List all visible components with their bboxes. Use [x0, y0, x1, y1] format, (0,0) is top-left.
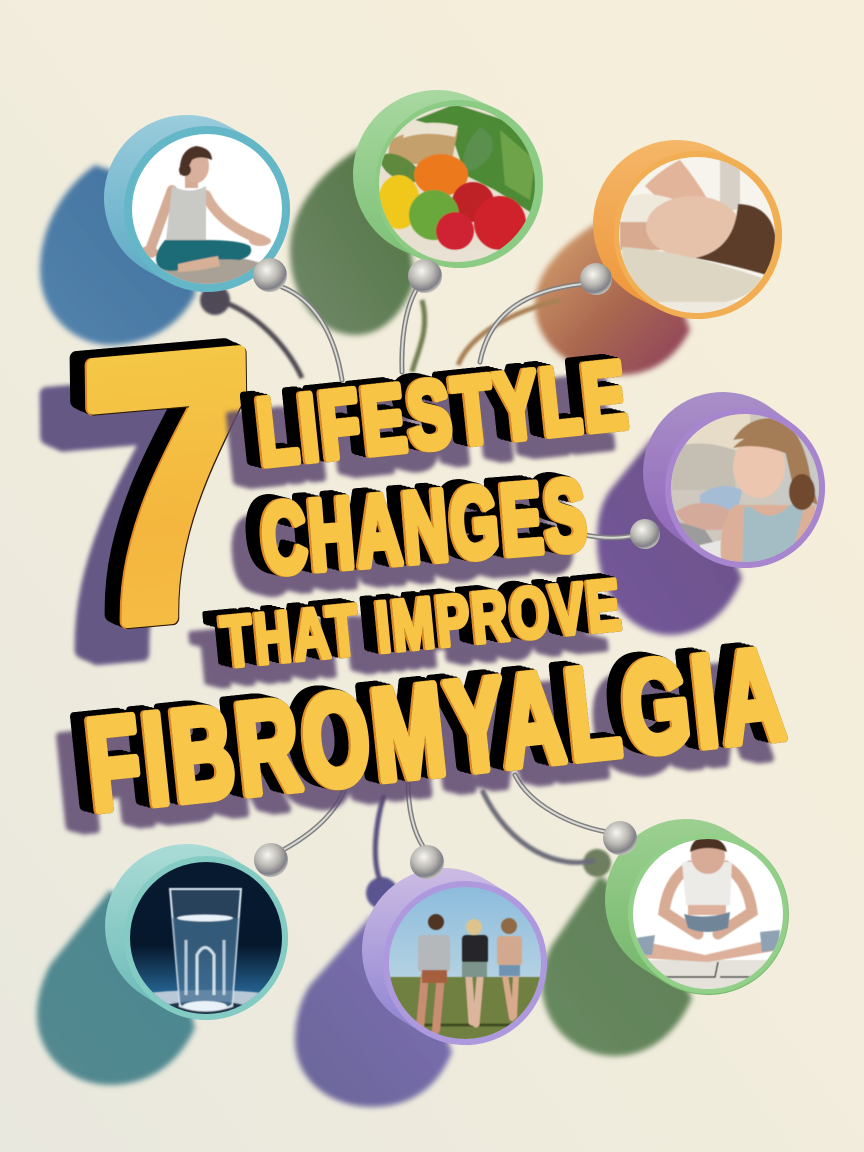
- photo: sleeping woman: [620, 160, 775, 313]
- title: LIFESTYLE: LIFESTYLE: [252, 341, 634, 486]
- disc: [444, 950, 465, 963]
- panel: walking outdoors: [383, 881, 550, 1052]
- disc: [677, 224, 698, 235]
- connector wires: [282, 284, 632, 850]
- panel: gentle stretching: [628, 834, 790, 995]
- disc: [187, 926, 206, 938]
- title: FIBROMYALGIA: FIBROMYALGIA: [81, 621, 794, 839]
- panel: yoga meditation: [124, 126, 290, 292]
- panel: hydration: [124, 856, 288, 1020]
- disc: [187, 198, 207, 209]
- cast shadows of the discs: [37, 145, 742, 1107]
- title: THAT IMPROVE: THAT IMPROVE: [218, 565, 626, 683]
- panel: healthy food: [375, 100, 543, 270]
- title: CHANGES: CHANGES: [258, 458, 593, 595]
- disc: [723, 472, 745, 488]
- title: [78, 269, 794, 839]
- photo: three people walking: [390, 913, 540, 1039]
- photo: woman stretching: [637, 839, 780, 989]
- wire and bead shadows: [200, 285, 611, 909]
- disc: [437, 174, 459, 184]
- chrome connector beads: [253, 258, 660, 879]
- disc: [686, 900, 708, 914]
- title: numeral 7: 7: [78, 269, 258, 705]
- panel: restful sleep: [614, 151, 782, 322]
- photo: woman relaxing: [672, 414, 819, 562]
- photo: glass of water: [152, 887, 260, 1014]
- photo: woman in lotus pose: [140, 146, 271, 288]
- photo: vegetables: [380, 106, 535, 262]
- panel: relaxation: [665, 408, 825, 570]
